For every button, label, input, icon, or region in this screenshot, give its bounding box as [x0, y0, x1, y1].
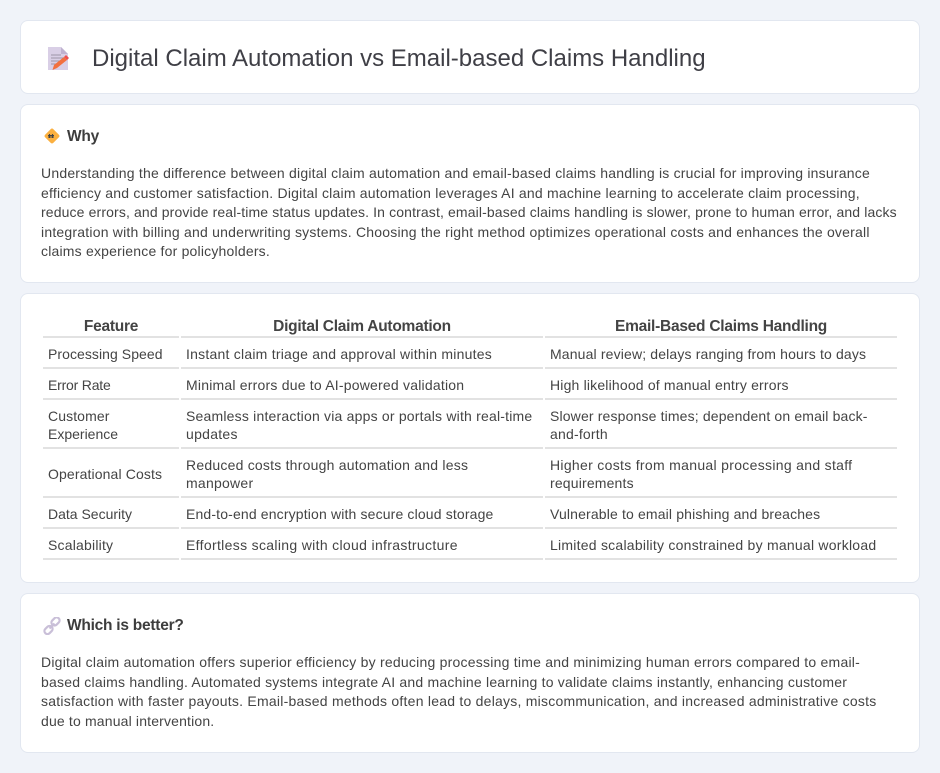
title: Digital Claim Automation vs Email-based Claims Handling — [92, 45, 706, 72]
why text: claims experience for policyholders. — [41, 243, 270, 259]
row: operational costs: Reduced costs through automation and less — [186, 457, 468, 473]
heading: why: Why — [67, 128, 99, 145]
icon: document with pencil — [48, 47, 69, 70]
row: customer experience: Slower response times; dependent on email back- — [550, 408, 868, 424]
which is better text: satisfaction with faster payouts. Email-based methods often lead to delays, miscommunication, and increased administrative costs — [41, 693, 876, 709]
table header: digital claim automation: Digital Claim Automation — [273, 318, 451, 335]
row: operational costs: manpower — [186, 475, 253, 491]
row: data security — [48, 506, 820, 522]
row: operational costs: Operational Costs — [48, 466, 162, 482]
row: processing speed: Manual review; delays ranging from hours to days — [550, 346, 866, 362]
header panel — [20, 20, 920, 94]
table header: email-based claims handling: Email-Based Claims Handling — [615, 318, 827, 335]
row: processing speed: Instant claim triage and approval within minutes — [186, 346, 492, 362]
row: customer experience: and-forth — [550, 426, 608, 442]
row: scalability: Scalability — [48, 537, 113, 553]
row: data security: Vulnerable to email phishing and breaches — [550, 506, 820, 522]
why text: integration with billing and underwriting systems. Choosing the right method optimizes operational costs and enhances the overall — [41, 224, 870, 240]
row: scalability — [48, 537, 876, 553]
row: scalability: Effortless scaling with cloud infrastructure — [186, 537, 458, 553]
panel: why — [20, 104, 920, 283]
which is better text: Digital claim automation offers superior efficiency by reducing processing time and minimizing human errors compared to email- — [41, 654, 860, 670]
row: data security: End-to-end encryption with secure cloud storage — [186, 506, 493, 522]
table header: feature: Feature — [84, 318, 138, 335]
why text: Understanding the difference between digital claim automation and email-based claims handling is crucial for improving insurance — [41, 165, 870, 181]
row: operational costs — [48, 457, 852, 491]
why text: reduce errors, and provide real-time status updates. In contrast, email-based claims handling is slower, prone to human error, and lacks — [41, 204, 897, 220]
row: data security: Data Security — [48, 506, 132, 522]
why text: efficiency and customer satisfaction. Digital claim automation leverages AI and machine learning to accelerate claim processing, — [41, 185, 860, 201]
row: scalability: Limited scalability constrained by manual workload — [550, 537, 876, 553]
which is better text: based claims handling. Automated systems integrate AI and machine learning to validate claims instantly, enhancing customer — [41, 674, 847, 690]
why text — [41, 165, 897, 259]
panel: comparison table — [20, 293, 920, 583]
row: customer experience: Seamless interaction via apps or portals with real-time — [186, 408, 532, 424]
row: error rate: Error Rate — [48, 377, 111, 393]
row: customer experience: updates — [186, 426, 238, 442]
row: processing speed — [48, 346, 866, 362]
icon: diamond sign — [44, 128, 60, 144]
icon: chain link — [43, 617, 61, 635]
row: customer experience: Customer — [48, 408, 109, 424]
row: customer experience — [48, 408, 868, 442]
row: processing speed: Processing Speed — [48, 346, 163, 362]
row: customer experience: Experience — [48, 426, 118, 442]
which is better text — [41, 654, 876, 729]
row: error rate — [48, 377, 789, 393]
row: error rate: High likelihood of manual entry errors — [550, 377, 789, 393]
row: error rate: Minimal errors due to AI-powered validation — [186, 377, 464, 393]
which is better text: due to manual intervention. — [41, 713, 214, 729]
panel: which is better — [20, 593, 920, 753]
row: operational costs: Higher costs from manual processing and staff — [550, 457, 852, 473]
heading: which is better: Which is better? — [67, 617, 184, 634]
row: operational costs: requirements — [550, 475, 634, 491]
